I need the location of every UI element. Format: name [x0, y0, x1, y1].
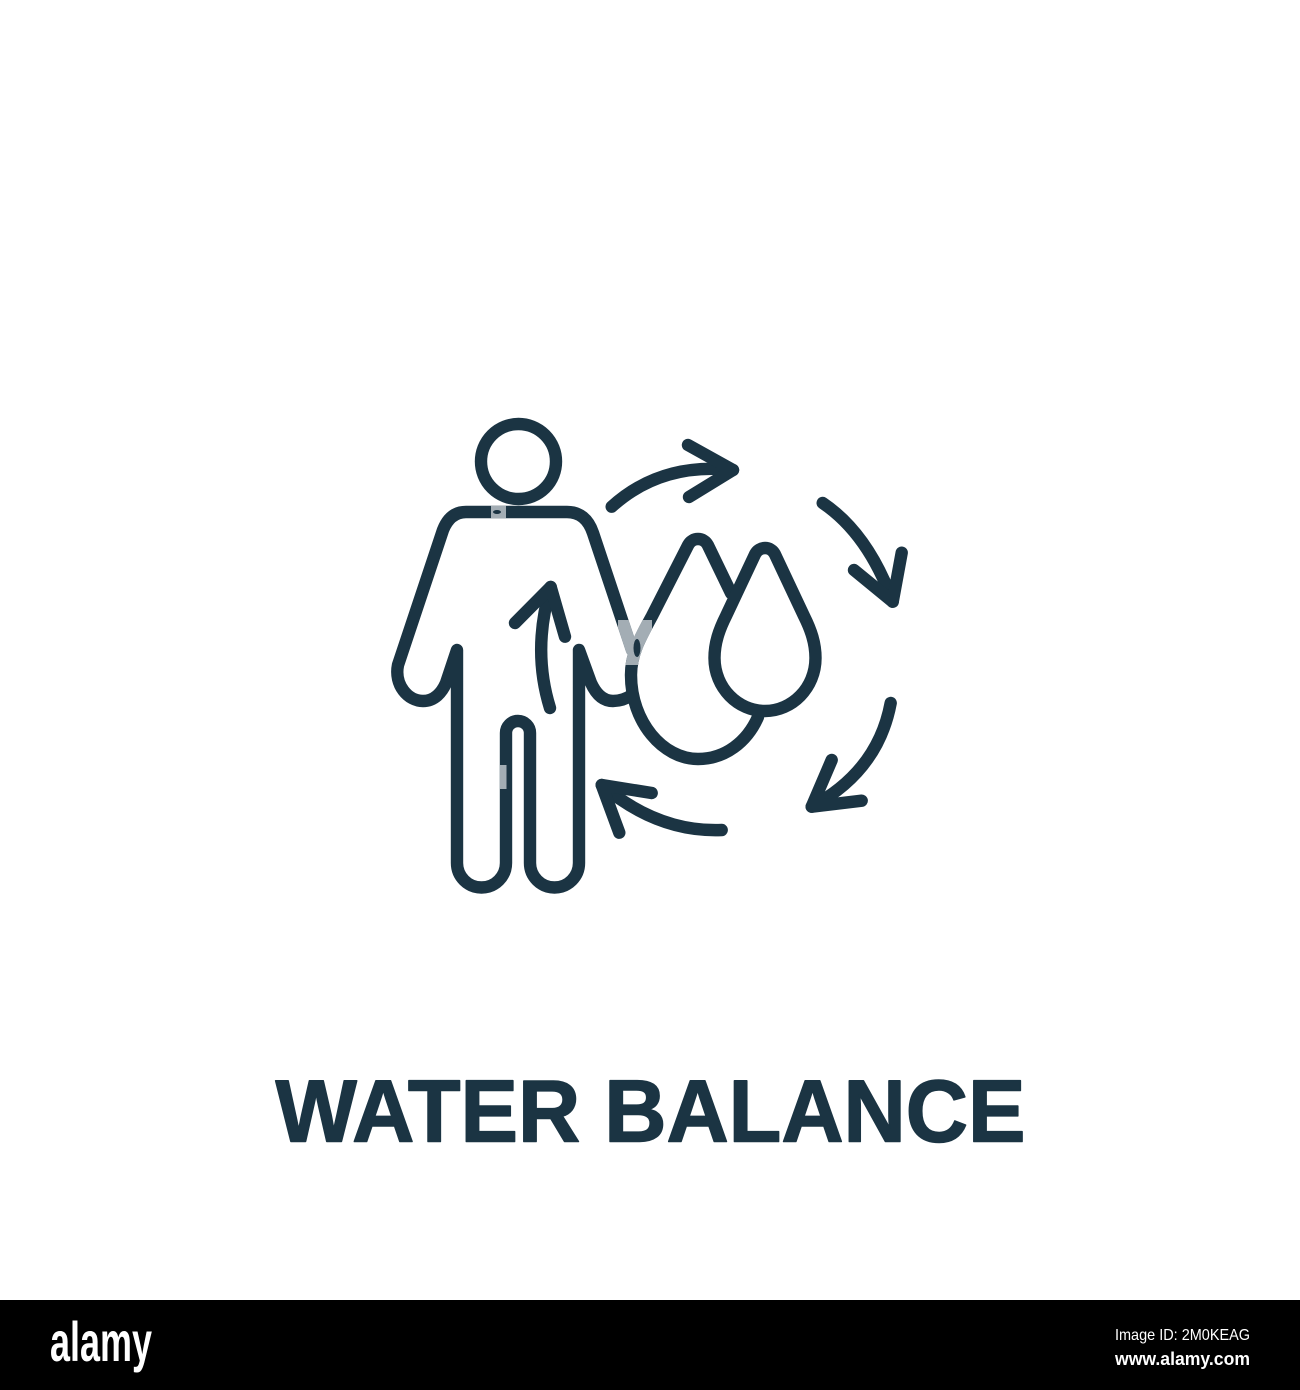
image id: Image ID: 2M0KEAG [1115, 1327, 1250, 1344]
person body outline [397, 512, 632, 887]
footer logo: alamy [50, 1310, 152, 1373]
icon: small water drop [714, 548, 816, 711]
person figure [397, 424, 632, 887]
website: www.alamy.com [1114, 1349, 1250, 1369]
arrow: lower right [812, 703, 891, 807]
icon: water balance [397, 424, 902, 887]
footer bar [0, 1300, 1300, 1390]
arrow: inside body [515, 587, 565, 708]
arrow: top [612, 445, 733, 507]
arrow: right [823, 503, 902, 602]
person head [481, 424, 556, 499]
watermark fragments over icon [491, 506, 652, 789]
infographic canvas [0, 418, 1300, 1390]
title: WATER BALANCE [276, 1062, 1026, 1160]
icon: large water drop [631, 539, 758, 759]
arrow: bottom [602, 785, 722, 833]
